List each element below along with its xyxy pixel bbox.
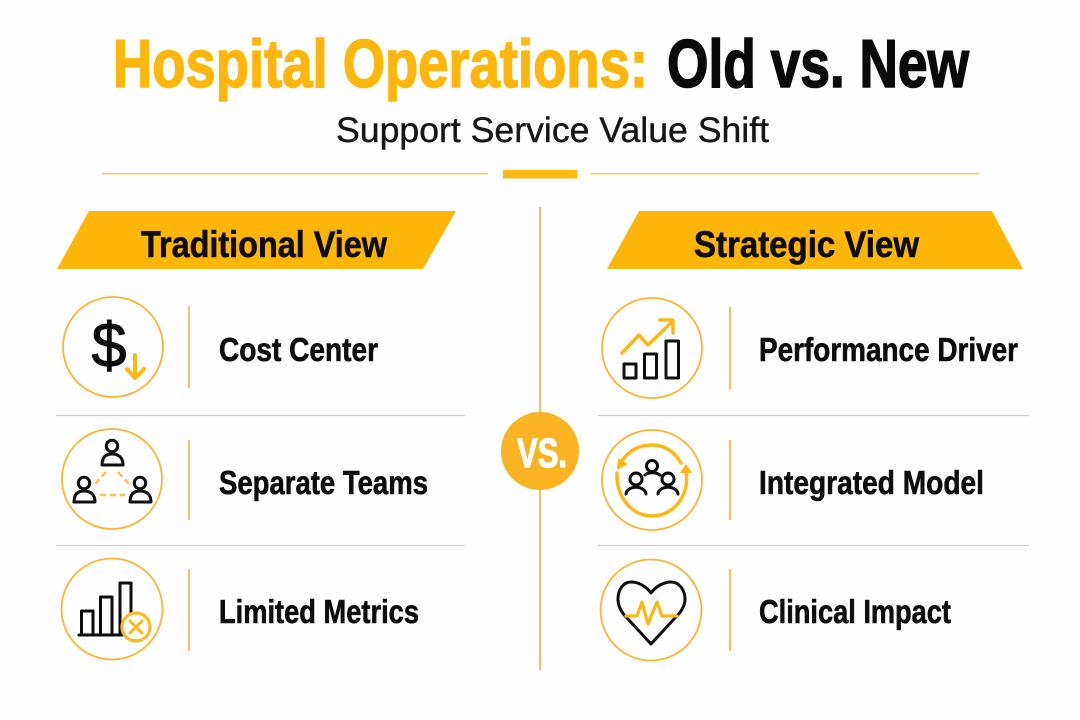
vs badge: VS.	[517, 430, 567, 476]
title: Hospital Operations:	[113, 26, 648, 102]
icon: heart with pulse	[600, 560, 702, 660]
row: cost center	[63, 297, 378, 397]
row: limited metrics	[62, 558, 419, 660]
label: cost center: Cost Center	[219, 331, 378, 368]
icon: dollar with down arrow: $	[91, 311, 127, 381]
label: limited metrics: Limited Metrics	[219, 593, 419, 630]
icon: rising chart	[602, 298, 702, 398]
icon: dollar with down arrow	[63, 297, 163, 397]
row: separate teams	[62, 429, 428, 529]
row: integrated model	[602, 430, 984, 530]
icon: separate people	[62, 429, 162, 529]
row: clinical impact	[600, 560, 951, 660]
subtitle: Support Service Value Shift	[336, 111, 769, 150]
vs badge	[501, 412, 579, 490]
heading: strategic view: Strategic View	[694, 224, 919, 265]
icon: integrated team cycle	[602, 430, 702, 530]
heading: traditional view: Traditional View	[141, 224, 387, 265]
icon: bars with x	[62, 558, 162, 660]
heading: strategic view	[607, 211, 1023, 269]
centre vertical line	[539, 207, 541, 670]
heading: traditional view	[57, 211, 456, 269]
panel: traditional view	[56, 211, 465, 660]
label: integrated model: Integrated Model	[759, 464, 984, 501]
title: Old vs. New	[667, 26, 970, 102]
panel: strategic view	[598, 211, 1029, 660]
row: performance driver	[602, 298, 1018, 398]
label: performance driver: Performance Driver	[759, 331, 1018, 368]
header divider	[102, 170, 979, 178]
label: separate teams: Separate Teams	[219, 464, 428, 501]
label: clinical impact: Clinical Impact	[759, 593, 951, 630]
